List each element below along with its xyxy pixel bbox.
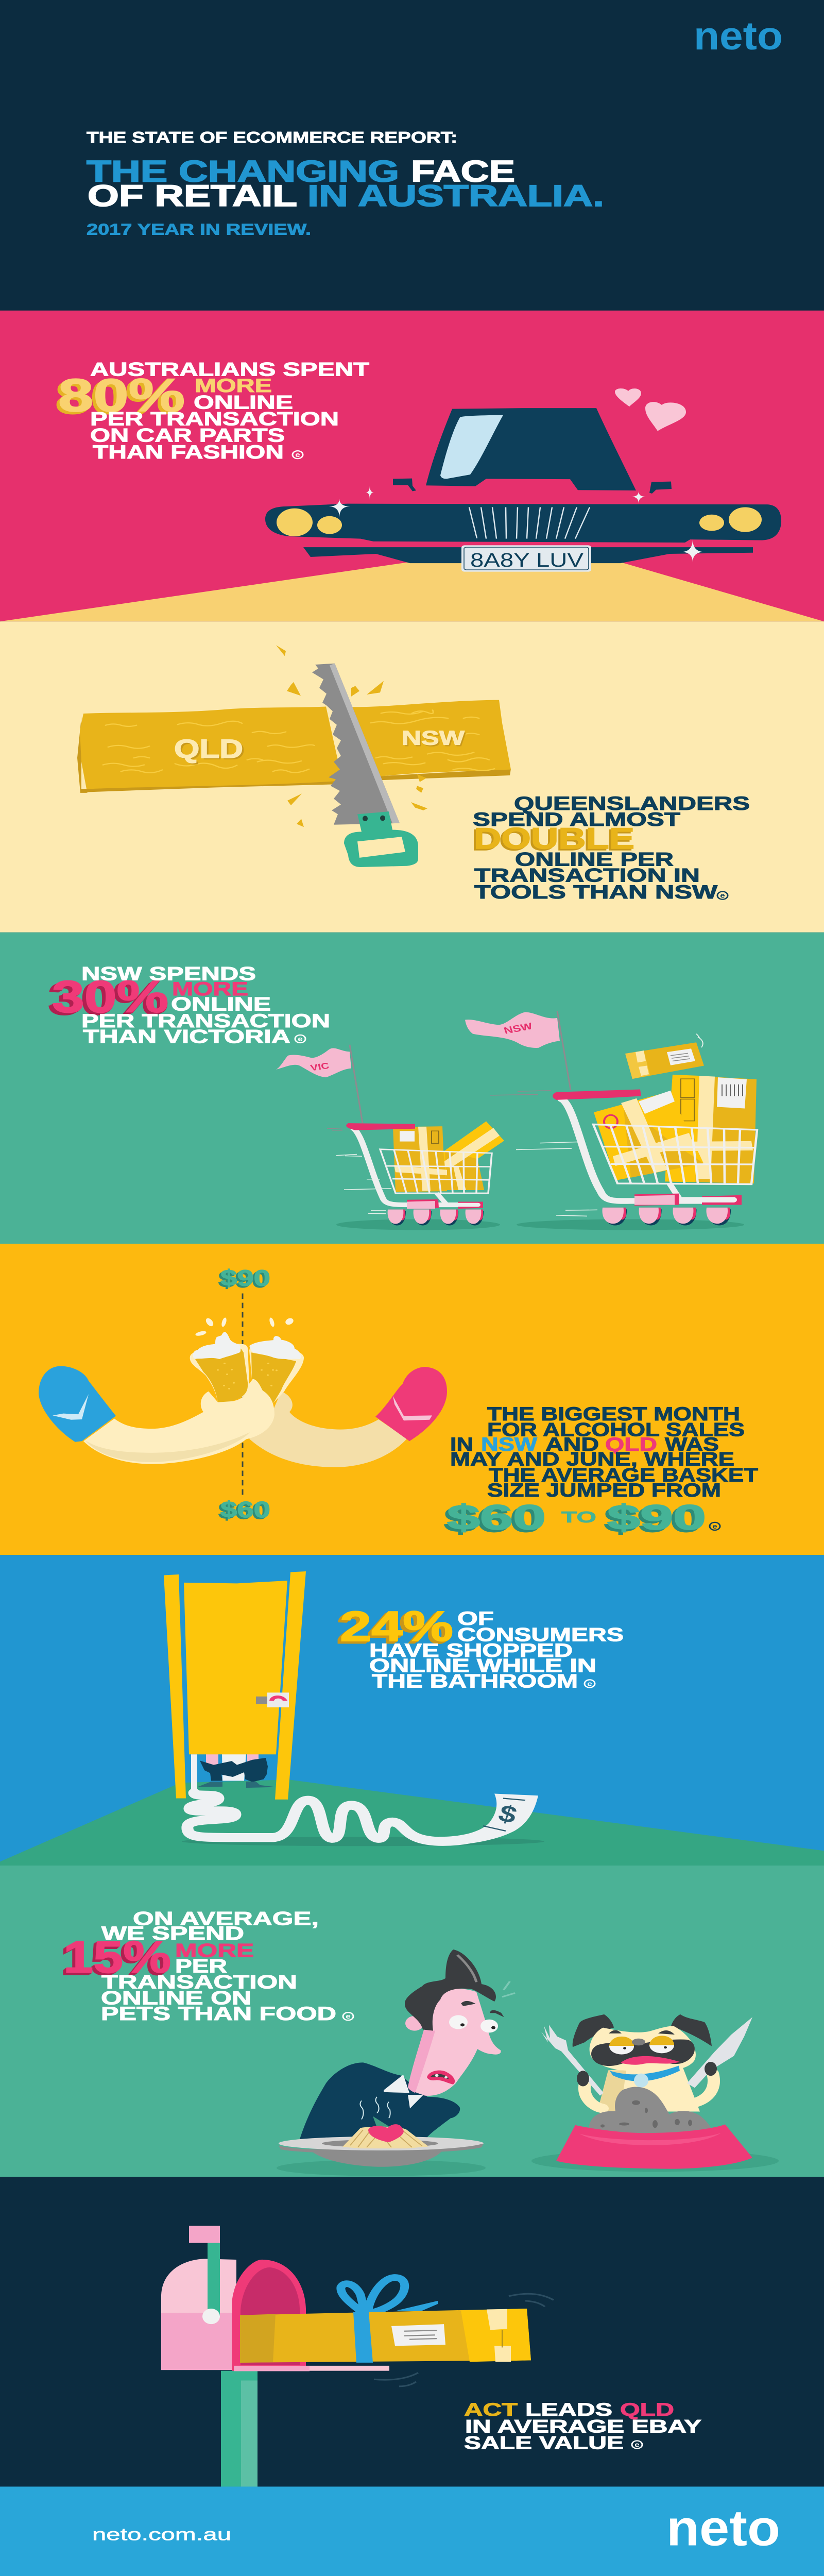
big number shadow: 80% [57,371,184,422]
stat text: 30% more: NSW SPENDS [81,963,256,985]
left sleeve fold [53,1394,89,1420]
wing mirrors [393,479,672,494]
stat text: ACT leads QLD: IN AVERAGE EBAY [465,2416,701,2436]
small cart: VIC [276,1045,504,1230]
stat text: alcohol sales: IN [450,1434,473,1455]
stat text: 80% more: THAN FASHION [93,442,284,463]
source icon [710,1522,720,1530]
tilted box [412,1121,504,1190]
handle [346,1123,415,1130]
spaghetti [342,2127,428,2148]
parcel tape [487,2309,511,2362]
stat text: 30% more: MORE [172,979,248,999]
main title [87,155,604,213]
big number shadow: 24% [337,1604,451,1652]
number plate: 8A8Y LUV [470,550,583,571]
legs [206,1753,259,1765]
source icon [585,1680,595,1688]
right sleeve fold [393,1396,432,1420]
bowl underside [309,2149,445,2167]
tilted box [594,1091,753,1180]
car illustration [265,388,781,572]
panel: car parts [0,311,824,621]
panel: eBay [0,2177,824,2487]
neck and face [408,1988,501,2096]
cross tape [394,1165,447,1175]
mailbox front [232,2260,306,2371]
bowl highlight [579,2133,721,2145]
source icon [632,2441,642,2449]
illustration: cheers [39,1317,447,1467]
label $60: $60 [220,1497,270,1522]
headlights [277,507,762,536]
stall door [164,1571,306,1800]
windscreen [440,415,503,479]
car body [265,504,781,543]
steam [360,2097,390,2120]
ground shadow [517,1219,744,1230]
stat text: alcohol sales: MAY AND JUNE, WHERE [450,1449,734,1470]
NSW flag: NSW [503,1021,534,1036]
plank right half [352,700,511,777]
brows [609,2030,675,2035]
source icon [717,892,728,900]
motion lines [516,1034,703,1216]
main title: FACE [411,155,515,188]
post [221,2371,258,2486]
stat text: double [472,793,750,903]
source icon: e [712,1523,717,1530]
hair highlight [457,1955,476,1982]
upright box [393,1126,447,1192]
handle grip hole [357,837,405,858]
double highlight: DOUBLE [472,824,632,857]
website link: neto.com.au [92,2526,231,2544]
panel: NSW vs Victoria [0,933,824,1244]
stat text: 24%: THE BATHROOM [372,1671,578,1692]
big number shadow: 15% [62,1933,170,1983]
big number shadow: 15% [60,1934,168,1985]
ground shadow [336,1219,500,1230]
rivets [363,816,385,821]
parcel end face [461,2309,531,2362]
big number shadow: 80% [55,372,182,423]
big number shadow: 24% [336,1605,450,1652]
left bubbles [217,1363,235,1389]
pink background [0,311,824,621]
large cart: NSW [465,1011,757,1230]
pug with dog food [531,2014,779,2172]
source icon: e [720,892,725,900]
ears [573,2014,712,2047]
wood grain [103,710,494,773]
label $90: $90 [220,1265,270,1291]
stat text: 15% more: PETS THAN FOOD [101,2004,336,2025]
label $90: $90 [218,1266,268,1292]
lowered trousers [200,1758,268,1782]
stat text: ACT leads QLD: SALE VALUE [464,2432,624,2453]
receipt shadow [182,1837,544,1846]
wheels [602,1208,731,1225]
source icon [293,451,303,459]
collar tag [634,2074,648,2088]
source icon: e [587,1680,592,1688]
receipt marks [483,1798,525,1831]
stat text: double: TOOLS THAN NSW [474,882,717,903]
big number shadow: 30% [51,972,168,1023]
VIC flag [276,1048,351,1077]
year in review: 2017 YEAR IN REVIEW. [87,221,311,238]
shirt point [408,2095,423,2108]
sauce [368,2124,404,2142]
right bubbles [261,1363,278,1386]
panel: footer [0,2486,824,2576]
door lock [256,1692,289,1707]
source icon: e [346,2013,351,2021]
right sleeve [375,1367,447,1441]
right beer glass [249,1336,304,1403]
mailbox illustration [161,2226,554,2486]
stat text: 80% more [55,359,370,463]
receipt roll [187,1793,500,1841]
boxes [393,1121,504,1192]
big number shadow: 30% [49,973,167,1023]
amount: $60 to $90: TO [561,1508,596,1526]
source icon: e [298,1036,303,1043]
flag pole [557,1011,571,1090]
label QLD: QLD [174,734,243,764]
stat text: ACT leads QLD [464,2399,701,2453]
cart frame [353,1128,480,1205]
amount main [447,1498,706,1537]
stat text: alcohol sales: WAS [665,1434,719,1455]
pink wraps [634,1194,742,1206]
stat text: alcohol sales: AND [545,1434,599,1455]
stat text: 15% more: ON AVERAGE, [133,1908,319,1929]
amount shadow: $90 [604,1500,703,1539]
stat text: alcohol sales: THE BIGGEST MONTH [487,1404,740,1425]
mailbox flag [189,2226,220,2324]
receipt upper strip [191,1754,197,1792]
report kicker: THE STATE OF ECOMMERCE REPORT: [87,129,457,146]
big number: 30% [52,971,168,1022]
saw [276,645,427,867]
stat text: double: SPEND ALMOST [473,809,681,831]
neto logo: neto [694,14,783,58]
floor [0,1780,824,1866]
brows [462,2002,502,2015]
collar [610,2066,680,2081]
stat text: 80% more: PER TRANSACTION [90,409,339,430]
gift ribbon bow [341,2278,405,2313]
panel: bathroom [0,1555,824,1866]
dark mask [591,2040,695,2066]
stat text: double: ONLINE PER [515,849,674,870]
big number shadow: 24% [339,1603,452,1651]
shirt collar [384,2075,409,2093]
blade [312,664,400,825]
left beer glass [190,1332,249,1402]
mailbox opening [241,2267,300,2365]
stat text: ACT leads QLD: ACT [464,2399,518,2420]
NSW flag [465,1012,560,1048]
label QLD: QLD [176,735,245,765]
motion lines [374,2294,554,2386]
footer background [0,2486,824,2576]
left sleeve [39,1366,116,1442]
beer drops [195,1317,295,1337]
navy background [0,2177,824,2487]
VIC flag: VIC [310,1061,330,1073]
stat text: 24%: ONLINE WHILE IN [369,1655,596,1676]
stat text: 80% more: ON CAR PARTS [90,425,285,446]
fork [541,2025,604,2096]
eyes [609,2036,674,2055]
stat text: 15% more: ONLINE ON [101,1988,251,2009]
hearts [615,388,686,431]
ribbon band [353,2312,373,2363]
source icon: e [295,451,300,459]
mouth [621,2056,680,2065]
basil [373,2116,391,2132]
nose [632,2039,645,2045]
receipt end [439,1793,538,1845]
dog food [589,2087,713,2134]
right jamb [275,1571,306,1800]
door panel [184,1581,287,1754]
big number shadow: 30% [48,974,165,1024]
left jamb [164,1574,186,1798]
main title: THE CHANGING [87,155,399,188]
shoes [197,1782,276,1788]
source icon [343,2012,353,2021]
big number: 15% [63,1931,171,1982]
main title: IN AUSTRALIA. [307,179,604,213]
plank shadow [77,717,511,793]
blade highlight [330,664,400,823]
motion lines [336,1154,391,1214]
man with spaghetti [277,1950,515,2176]
main title: OF RETAIL [88,179,297,213]
pink dog bowl [556,2124,752,2169]
panel: tools [0,621,824,933]
stat text: 15% more: PER [175,1956,227,1977]
receipt [187,1754,538,1845]
stat text: 30% more [48,963,330,1047]
stat text: 24%: HAVE SHOPPED [369,1640,573,1661]
stat text: ACT leads QLD: LEADS [525,2399,612,2420]
head [590,2026,696,2071]
mailbox body upper [161,2259,236,2313]
amount shadow [444,1500,703,1539]
stat text: 15% more [60,1908,336,2025]
stat text: alcohol sales [450,1404,759,1501]
big number shadow: 15% [61,1933,169,1984]
big number: 24% [340,1602,453,1650]
mailbox body lower [161,2313,237,2370]
double highlight: DOUBLE [474,822,634,855]
amount main: $90 [607,1498,706,1537]
pink wraps [407,1199,483,1209]
ear [405,2016,424,2031]
stat text: 15% more: WE SPEND [101,1923,244,1944]
label NSW: NSW [402,726,465,749]
panel: alcohol sales [0,1244,824,1555]
wood plank [77,700,511,793]
left arm shade [85,1432,250,1462]
parcel shaded end [240,2314,276,2363]
bumper [303,547,753,563]
stat text: 80% more: AUSTRALIANS SPENT [90,359,370,380]
stat text: 30% more: PER TRANSACTION [81,1010,330,1031]
right foam [249,1336,301,1359]
stat text: alcohol sales: NSW [481,1434,537,1455]
upright box [665,1075,757,1183]
label $60: $60 [218,1498,268,1523]
amount shadow: $60 [444,1500,543,1539]
wheels [388,1210,484,1226]
plate well [322,2140,438,2147]
source icon [295,1035,305,1043]
handle [553,1090,641,1100]
header background [0,0,824,311]
label NSW: NSW [403,728,467,751]
neck shade [408,2030,435,2093]
flag pole [350,1045,363,1123]
handle [344,811,418,867]
road [0,562,824,621]
mailbox door [234,2366,389,2371]
stat text: 24%: CONSUMERS [457,1624,624,1646]
stat text: double: QUEENSLANDERS [514,793,750,815]
left arm [83,1379,274,1464]
basket grid [380,1149,492,1193]
stat text: 30% more: THAN VICTORIA [83,1026,290,1047]
big number: 80% [58,370,185,421]
bowl shadow [531,2150,779,2172]
stat text: ACT leads QLD: QLD [620,2399,674,2420]
eyes [449,2015,498,2032]
panel: pets [0,1866,824,2177]
plate rim [279,2137,484,2150]
parcel label [391,2324,445,2346]
amount main: $60 [447,1498,546,1537]
panel: header [0,0,824,311]
green background [0,933,824,1244]
pug arms [585,2074,714,2108]
knife [687,2017,752,2088]
basket height marker [242,1294,243,1499]
grille [469,507,590,539]
stat text: alcohol sales: SIZE JUMPED FROM [487,1480,721,1501]
stat text: 24% [336,1602,624,1692]
stat text: alcohol sales: THE AVERAGE BASKET [489,1465,759,1486]
pug body [597,2065,700,2112]
stat text: 15% more: MORE [175,1940,254,1961]
cart frame [561,1099,737,1201]
stat text: double: TRANSACTION IN [474,865,700,886]
suit [300,2062,460,2139]
neto logo: neto [666,2500,780,2556]
dollar sign: $ [495,1800,520,1828]
stat text: 30% more: ONLINE [171,994,271,1015]
stat text: 24%: OF [457,1608,494,1630]
stat text: alcohol sales: QLD [605,1434,657,1455]
car cabin [426,408,636,490]
mouth [427,2071,455,2084]
yellow background [0,1244,824,1555]
stat text: alcohol sales: FOR ALCOHOL SALES [487,1419,745,1440]
basket grid [593,1124,757,1184]
blue background [0,1555,824,1866]
green background [0,1866,824,2177]
cream background [0,621,824,933]
big number shadow: 80% [56,371,183,423]
toilet [222,1753,246,1781]
sawdust [276,645,427,827]
top parcel [625,1042,704,1079]
plate shadow [277,2160,486,2176]
stat text: 80% more: ONLINE [194,392,293,413]
stat text: 80% more: MORE [195,376,272,397]
left foam [193,1332,241,1359]
stat text: 15% more: TRANSACTION [101,1972,297,1993]
post highlight [241,2381,258,2486]
hair [405,1950,496,2031]
paws [577,2062,717,2086]
right arm [249,1392,407,1467]
sweat marks [502,1981,515,1997]
plank left half [80,706,340,789]
parcel [240,2309,531,2363]
amount: $60 to $90 [444,1498,706,1539]
source icon: e [634,2441,640,2449]
sparkles [329,485,705,563]
